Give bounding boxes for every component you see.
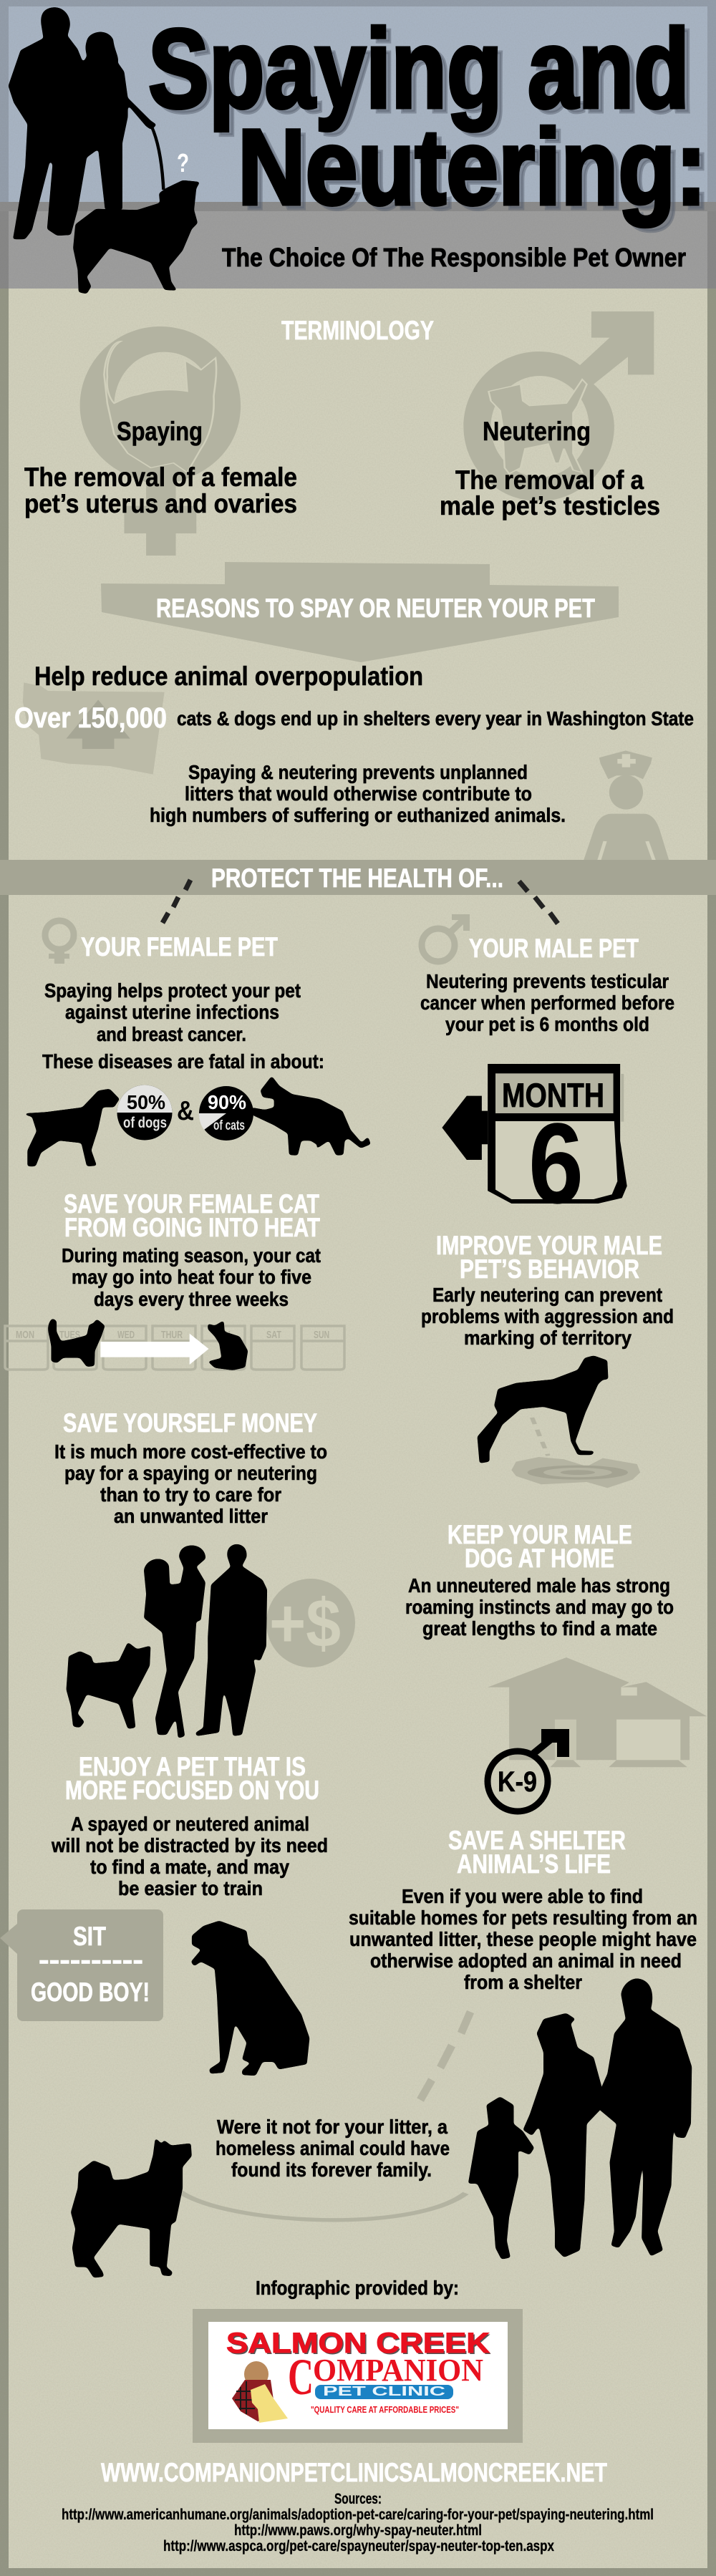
text: testicular cancer: cancer when performed before — [420, 992, 674, 1014]
text: easier to train: A spayed or neutered animal — [71, 1813, 309, 1835]
heading: terminology: TERMINOLOGY — [281, 316, 434, 345]
text: uterine infections — [42, 979, 324, 1072]
heading: focused pet: MORE FOCUSED ON YOU — [65, 1776, 319, 1805]
text: cost effective: an unwanted litter — [114, 1505, 268, 1527]
heading: shelter animal: ANIMAL’S LIFE — [457, 1849, 611, 1879]
text: neutering definition: The removal of a — [455, 465, 644, 495]
text: roaming: great lengths to find a mate — [422, 1617, 657, 1640]
text: unplanned litters: high numbers of suffering or euthanized animals. — [150, 804, 566, 826]
text: testicular cancer — [420, 970, 674, 1035]
heading: save money: SAVE YOURSELF MONEY — [63, 1408, 317, 1438]
icon: leash — [152, 127, 163, 190]
text: forever family — [216, 2116, 450, 2181]
arrow banner: reasons — [101, 562, 619, 662]
arrow banner: reasons: REASONS TO SPAY OR NEUTER YOUR PET — [156, 594, 595, 623]
sources: http://www.aspca.org/pet-care/spayneuter/spay-neuter-top-ten.aspx — [163, 2538, 554, 2555]
text: mating season: During mating season, your cat — [62, 1244, 321, 1267]
text: aggression: marking of territory — [464, 1327, 632, 1349]
text: unplanned litters: litters that would otherwise contribute to — [185, 783, 532, 805]
icon: male symbol with dog — [463, 311, 654, 501]
arrow: dashed path — [420, 2012, 470, 2100]
logo: Salmon Creek Companion Pet Clinic: C — [288, 2348, 314, 2406]
stat: over 150,000: Over 150,000 — [14, 702, 167, 734]
text: testicular cancer: your pet is 6 months old — [445, 1013, 649, 1035]
text: neutering definition — [440, 417, 660, 520]
sources: Sources: — [334, 2491, 382, 2507]
text: spaying definition: The removal of a female — [24, 463, 297, 492]
icon: week calendar: SUN — [314, 1329, 329, 1341]
heading: shelter animal: SAVE A SHELTER — [448, 1826, 626, 1855]
text: roaming — [405, 1574, 674, 1640]
text: aggression: Early neutering can prevent — [432, 1284, 662, 1306]
heading: improve behavior: PET’S BEHAVIOR — [460, 1254, 639, 1284]
panel: male behavior — [421, 1231, 674, 1488]
icon: month 6 calendar — [442, 1064, 627, 1227]
heading: going into heat: SAVE YOUR FEMALE CAT — [64, 1189, 319, 1219]
sources: http://www.paws.org/why-spay-neuter.html — [234, 2522, 482, 2539]
icon: dog — [25, 1089, 120, 1166]
heading: keep dog home: DOG AT HOME — [465, 1544, 614, 1573]
callout: sit good boy: ---------- — [39, 1945, 143, 1975]
text: cost effective: It is much more cost-effective to — [54, 1440, 327, 1463]
icon: white arrow — [100, 1334, 208, 1365]
text: easier to train: to find a mate, and may — [90, 1856, 289, 1878]
heading: going into heat: FROM GOING INTO HEAT — [64, 1213, 320, 1242]
icon: week calendar: MON — [16, 1329, 34, 1341]
heading: your male pet: YOUR MALE PET — [469, 934, 639, 963]
panel: terminology — [24, 311, 660, 556]
heading: overpopulation: Help reduce animal overpopulation — [34, 662, 423, 691]
text: forever family: homeless animal could have — [216, 2137, 450, 2159]
logo: Salmon Creek Companion Pet Clinic: PET CLINIC — [323, 2384, 445, 2398]
icon: week calendar: THUR — [161, 1329, 183, 1341]
callout: sit good boy — [0, 1909, 163, 2021]
heading: your female pet: YOUR FEMALE PET — [81, 932, 278, 962]
logo: Salmon Creek Companion Pet Clinic: OMPANION — [313, 2353, 483, 2388]
icon: K-9 male symbol — [488, 1729, 569, 1811]
icon: small male symbol — [422, 914, 470, 962]
text: uterine infections: against uterine infections — [65, 1001, 279, 1023]
text: aggression: problems with aggression and — [421, 1305, 674, 1327]
text: cost effective: than to try to care for — [100, 1483, 281, 1506]
icon: house — [488, 1657, 707, 1767]
chart: 90% of cats — [199, 1086, 253, 1141]
icon: week calendar: TUES — [59, 1329, 80, 1341]
text: uterine infections: Spaying helps protect your pet — [44, 979, 301, 1002]
icon: question mark: ? — [177, 148, 189, 178]
icon: week calendar — [5, 1326, 344, 1370]
panel: save female cat from heat — [5, 1189, 344, 1370]
icon: month 6 calendar: 6 — [528, 1099, 584, 1227]
callout: sit good boy: GOOD BOY! — [31, 1977, 150, 2007]
sources — [62, 2491, 654, 2555]
text: neutering definition: male pet’s testicles — [440, 491, 660, 520]
text: spaying definition: pet’s uterus and ovaries — [24, 489, 297, 518]
text: cost effective: pay for a spaying or neutering — [64, 1462, 317, 1484]
chart: 90% of cats: 90% — [208, 1091, 246, 1113]
panel: female pet — [25, 921, 371, 1166]
icon: couple silhouette — [8, 7, 157, 239]
icon: walking family — [468, 1978, 692, 2260]
logo: Salmon Creek Companion Pet Clinic: "QUALITY CARE AT AFFORDABLE PRICES" — [311, 2404, 459, 2415]
heading: shelter animal — [448, 1826, 626, 1879]
text: forever family: Were it not for your litter, a — [217, 2116, 448, 2138]
logo: Salmon Creek Companion Pet Clinic: SALMON CREEK — [228, 2329, 491, 2360]
icon: week calendar: FRI — [216, 1329, 231, 1341]
icon: family silhouette — [66, 1544, 267, 1738]
heading: focused pet — [65, 1752, 319, 1805]
text: aggression — [421, 1284, 674, 1349]
text: suitable homes: Even if you were able to find — [402, 1885, 643, 1907]
icon: K-9 male symbol: K-9 — [498, 1766, 537, 1798]
text: roaming: roaming instincts and may go to — [405, 1596, 674, 1618]
text: ampersand: & — [177, 1096, 194, 1126]
icon: cat — [251, 1076, 371, 1156]
text: cost effective — [54, 1440, 327, 1527]
text: mating season: may go into heat four to five — [72, 1266, 311, 1288]
panel: male pet — [420, 914, 674, 1227]
dashed connectors — [163, 880, 558, 924]
icon: small female symbol — [45, 921, 74, 964]
text: neutering definition: Neutering — [483, 417, 591, 446]
icon: marking dog — [478, 1355, 640, 1488]
chart: 90% of cats: of cats — [213, 1118, 245, 1133]
panel: overpopulation — [14, 662, 694, 861]
icon: sitting dog — [191, 1921, 309, 2076]
logo: Salmon Creek Companion Pet Clinic — [193, 2309, 523, 2443]
banner: protect the health — [0, 860, 716, 895]
icon: female symbol with cat — [80, 326, 241, 556]
text: provided by: Infographic provided by: — [256, 2277, 459, 2299]
icon: walking cat — [48, 1318, 105, 1367]
chart: 50% of dogs — [117, 1085, 172, 1140]
text: suitable homes: from a shelter — [464, 1971, 582, 1993]
text: mating season: days every three weeks — [94, 1288, 289, 1310]
logo: Salmon Creek Companion Pet Clinic: SALMON CREEK — [226, 2328, 490, 2359]
text: easier to train: will not be distracted by its need — [51, 1834, 328, 1856]
text: suitable homes: otherwise adopted an animal in need — [370, 1950, 682, 1972]
text: easier to train — [51, 1813, 328, 1899]
icon: coin with plus dollar: +$ — [269, 1585, 341, 1662]
text: roaming: An unneutered male has strong — [408, 1574, 670, 1597]
title — [148, 6, 712, 231]
chart: 50% of dogs: 50% — [127, 1091, 165, 1113]
heading: improve behavior — [436, 1231, 662, 1284]
text: suitable homes — [349, 1885, 697, 1993]
banner: protect the health: PROTECT THE HEALTH OF... — [211, 863, 503, 893]
icon: Washington state map — [23, 682, 165, 775]
text: unplanned litters: Spaying & neutering prevents unplanned — [188, 761, 528, 783]
heading: focused pet: ENJOY A PET THAT IS — [79, 1752, 306, 1781]
icon: month 6 calendar: MONTH — [502, 1076, 604, 1114]
text: unplanned litters — [150, 761, 566, 826]
panel: focused pet — [0, 1752, 328, 2076]
panel: keep dog home — [405, 1520, 707, 1811]
header: owners and dog silhouette — [8, 7, 200, 294]
callout: sit good boy: SIT — [73, 1922, 106, 1951]
panel: shelter animal — [71, 1826, 697, 2278]
heading: going into heat — [64, 1189, 320, 1242]
icon: nurse — [584, 750, 669, 861]
chart: 50% of dogs: of dogs — [123, 1115, 167, 1131]
text: forever family: found its forever family. — [231, 2159, 432, 2181]
heading: keep dog home — [448, 1520, 632, 1573]
icon: dog silhouette — [73, 180, 200, 294]
text: spaying definition: Spaying — [117, 417, 203, 446]
text: easier to train: be easier to train — [118, 1877, 263, 1899]
icon: dog on leash — [71, 2138, 466, 2278]
text: testicular cancer: Neutering prevents testicular — [426, 970, 669, 992]
heading: keep dog home: KEEP YOUR MALE — [448, 1520, 632, 1549]
text: spaying definition — [24, 417, 297, 518]
icon: week calendar: WED — [117, 1329, 135, 1341]
text: mating season — [62, 1244, 321, 1310]
text: uterine infections: These diseases are fatal in about: — [42, 1050, 324, 1072]
heading: improve behavior: IMPROVE YOUR MALE — [436, 1231, 662, 1260]
icon: week calendar: SAT — [266, 1329, 281, 1341]
icon: sitting cat — [208, 1320, 248, 1370]
text: uterine infections: and breast cancer. — [97, 1023, 246, 1045]
panel: save money — [54, 1408, 355, 1738]
